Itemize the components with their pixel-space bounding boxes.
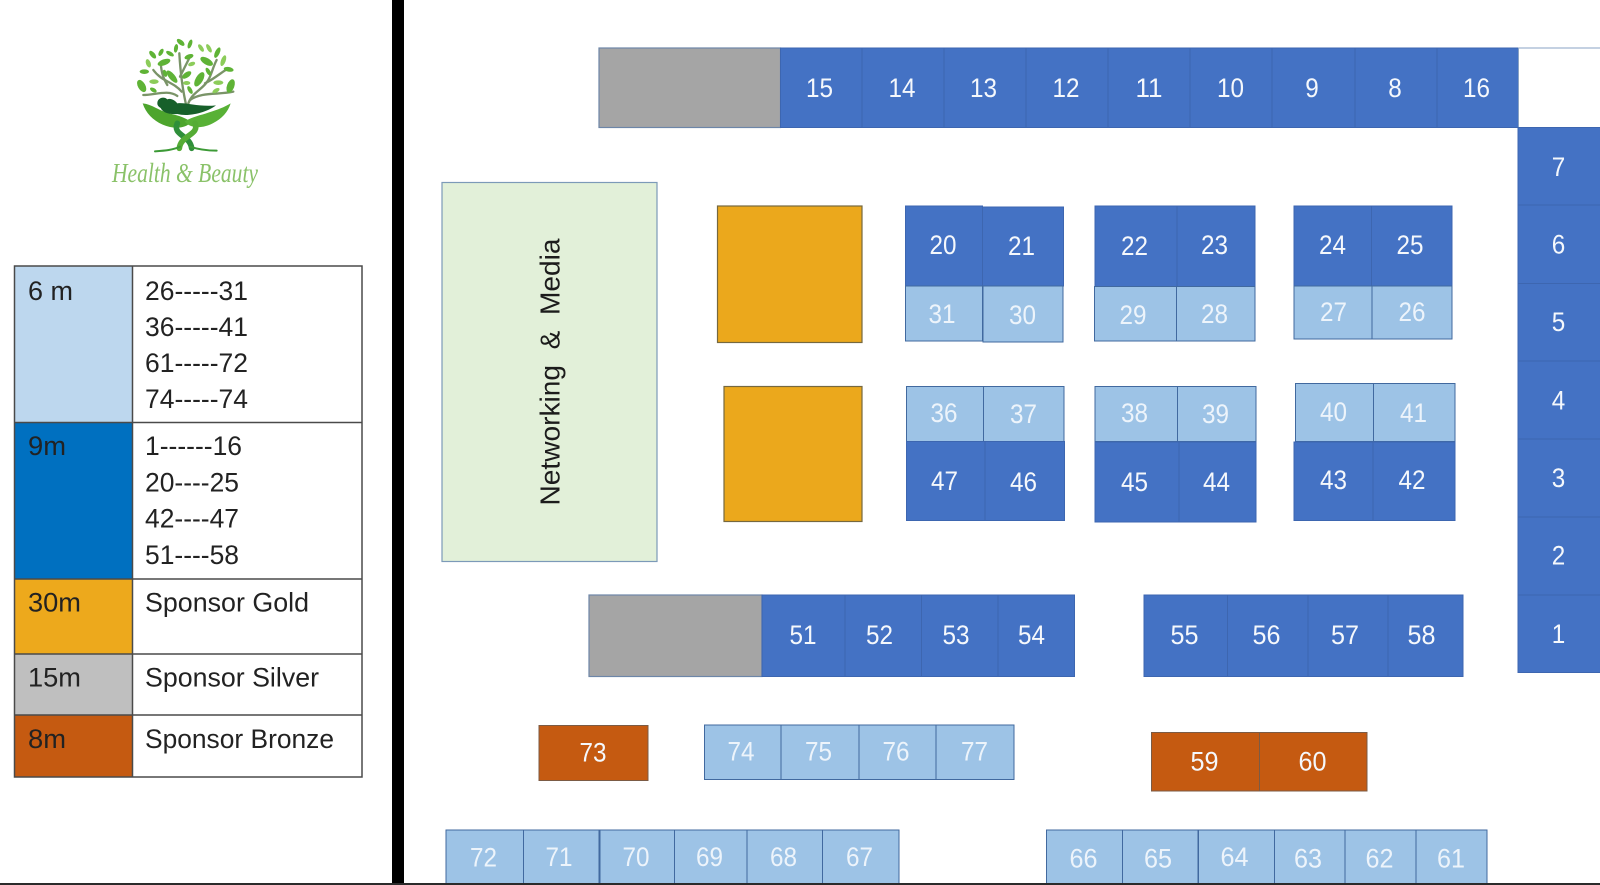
booth 51	[762, 595, 845, 676]
booth 3	[1518, 439, 1600, 517]
logo wordmark: Health & Beauty	[111, 158, 258, 188]
booth 43	[1294, 442, 1373, 520]
booth row 72-67	[446, 830, 899, 885]
booth 74: 74	[728, 736, 754, 766]
booth 69: 69	[696, 842, 723, 872]
booth 71: 71	[546, 842, 572, 872]
booth 75	[781, 725, 859, 780]
networking and media zone: Networking & Media	[534, 238, 566, 506]
booth 51: 51	[790, 620, 816, 650]
booth 77	[936, 725, 1014, 780]
legend: silver: Sponsor Silver	[145, 662, 319, 692]
booth 2	[1518, 517, 1600, 595]
booth 20	[906, 206, 982, 286]
booth 22	[1095, 206, 1177, 286]
booth 12	[1026, 48, 1108, 128]
booth 63	[1274, 830, 1345, 885]
booth 21: 21	[1008, 231, 1035, 261]
booth 6: 6	[1552, 230, 1565, 260]
booth 31: 31	[928, 299, 956, 329]
booth 11	[1108, 48, 1190, 128]
booth 10	[1190, 48, 1272, 128]
booth 60	[1260, 732, 1367, 791]
booth 39: 39	[1202, 399, 1229, 429]
booth 43: 43	[1320, 465, 1347, 495]
booth 23: 23	[1201, 230, 1228, 260]
booth 72	[446, 830, 524, 885]
booth 28: 28	[1201, 299, 1228, 329]
booth 45	[1095, 442, 1179, 522]
booth 38: 38	[1121, 398, 1148, 428]
booth 8: 8	[1388, 73, 1402, 103]
booth block 38-39 / 45-44	[1095, 386, 1256, 522]
booth 65: 65	[1144, 844, 1172, 874]
booth block 24-25 / 27-26	[1294, 206, 1452, 339]
booth 15	[780, 48, 862, 128]
logo: Health & Beauty tree	[111, 38, 258, 188]
booth 27: 27	[1320, 297, 1347, 327]
booth 65	[1122, 830, 1198, 885]
legend table	[14, 266, 362, 777]
booth 8	[1355, 48, 1437, 128]
booth 73	[539, 726, 648, 780]
booth 40	[1296, 384, 1374, 442]
legend: 9m booth ranges: 1------16	[145, 431, 242, 461]
booth 1	[1518, 595, 1600, 672]
booth 3: 3	[1552, 463, 1565, 493]
booth 7	[1518, 128, 1600, 205]
booth 39	[1178, 386, 1256, 442]
silver sponsor booth lower	[589, 595, 762, 676]
booth 40: 40	[1320, 397, 1347, 427]
booth 12: 12	[1052, 73, 1080, 103]
booth 20: 20	[930, 230, 956, 260]
legend: 6 m booth ranges: 74-----74	[145, 384, 248, 414]
booth 16: 16	[1463, 73, 1490, 103]
booth 30	[983, 286, 1063, 342]
legend: 9m size: 9m	[28, 431, 66, 461]
empty corner outline	[1518, 48, 1600, 128]
booth 9: 9	[1305, 73, 1319, 103]
booth row 74-77	[704, 725, 1014, 780]
booth 73: 73	[580, 738, 606, 768]
booth 66	[1046, 830, 1122, 885]
booth 71	[524, 830, 599, 885]
booth 52	[845, 595, 922, 676]
booth 7: 7	[1552, 152, 1565, 182]
icon: reclining figure	[157, 98, 216, 115]
icon: tree branches	[143, 53, 233, 107]
right booth column	[1518, 128, 1600, 672]
booth 25: 25	[1396, 230, 1424, 260]
booth 21	[982, 207, 1064, 286]
booth 44: 44	[1203, 467, 1230, 497]
booth 62: 62	[1366, 844, 1394, 874]
booth 54: 54	[1018, 620, 1045, 650]
booth 64: 64	[1220, 842, 1248, 872]
booth 36	[906, 386, 984, 442]
booth 41: 41	[1400, 398, 1427, 428]
legend: 6 m booth ranges: 36-----41	[145, 312, 248, 342]
booth 41	[1374, 384, 1455, 442]
gold sponsor booth lower	[724, 386, 862, 522]
legend: gold: 30m	[28, 588, 81, 618]
booth 13: 13	[970, 73, 997, 103]
booth 24	[1294, 206, 1372, 286]
booth 14	[862, 48, 944, 128]
booth 24: 24	[1319, 230, 1346, 260]
booth 61: 61	[1437, 844, 1465, 874]
booth 37	[984, 386, 1064, 442]
silver sponsor booth top	[599, 48, 780, 128]
booth row 66-61	[1046, 830, 1487, 885]
icon: leaves	[135, 38, 236, 95]
booth 53	[922, 595, 998, 676]
booth 53: 53	[942, 620, 970, 650]
booth 67: 67	[846, 842, 873, 872]
booth 29: 29	[1120, 300, 1146, 330]
legend: 6 m booth ranges: 61-----72	[145, 348, 248, 378]
booth 46: 46	[1010, 467, 1037, 497]
booth 38	[1095, 386, 1178, 442]
booth 68: 68	[770, 842, 797, 872]
booth 56: 56	[1252, 620, 1280, 650]
legend: silver: 15m	[28, 662, 81, 692]
booth 62	[1345, 830, 1416, 885]
booth 10: 10	[1217, 73, 1244, 103]
booth 5: 5	[1552, 307, 1565, 337]
booth 67	[822, 830, 899, 885]
booth 16	[1437, 48, 1518, 128]
booth row 51-54	[589, 595, 1074, 676]
booth 66: 66	[1070, 844, 1098, 874]
booth 5	[1518, 284, 1600, 361]
booth 22: 22	[1121, 231, 1148, 261]
networking and media zone	[442, 182, 657, 562]
booth 47	[906, 442, 985, 520]
booth 47: 47	[931, 466, 958, 496]
booth 29	[1094, 286, 1176, 341]
booth 57	[1308, 595, 1388, 676]
booth block 20-21 / 31-30	[906, 206, 1064, 342]
booth 72: 72	[470, 842, 497, 872]
legend: gold: Sponsor Gold	[145, 588, 309, 618]
booth 28	[1176, 286, 1255, 341]
legend: bronze: 8m	[28, 724, 66, 754]
booth 77: 77	[961, 736, 988, 766]
booth 59: 59	[1190, 746, 1218, 776]
bottom edge line	[0, 883, 1600, 885]
booth 13	[944, 48, 1026, 128]
booth 27	[1294, 286, 1372, 339]
booth 46	[985, 442, 1064, 520]
booth 30: 30	[1009, 300, 1036, 330]
gold sponsor booth upper	[718, 206, 862, 342]
booth 52: 52	[866, 620, 893, 650]
booth 45: 45	[1121, 467, 1148, 497]
booth block 22-23 / 29-28	[1094, 206, 1255, 341]
booth 36: 36	[930, 398, 958, 428]
legend: 9m booth ranges: 51----58	[145, 540, 239, 570]
booth 76	[859, 725, 936, 780]
legend: gold	[28, 588, 309, 618]
booth 25	[1372, 206, 1452, 286]
booth 76: 76	[882, 736, 910, 766]
icon: twisted trunk	[155, 123, 217, 151]
booth 58: 58	[1408, 620, 1436, 650]
legend: bronze	[28, 724, 334, 754]
booth 55	[1144, 595, 1228, 676]
booth 54	[998, 595, 1074, 676]
top booth row	[599, 48, 1600, 128]
icon: cupped hands	[143, 103, 191, 128]
legend: 6 m booth ranges: 26-----31	[145, 276, 248, 306]
booth 14: 14	[888, 73, 916, 103]
black divider	[392, 0, 404, 885]
booth 2: 2	[1552, 540, 1565, 570]
booth 31	[906, 286, 982, 341]
booth block 40-41 / 43-42	[1294, 384, 1455, 520]
booth block 36-37 / 47-46	[906, 386, 1064, 520]
booth 9	[1272, 48, 1355, 128]
booth 37: 37	[1010, 399, 1037, 429]
legend: 9m booth ranges: 20----25	[145, 468, 239, 498]
booth 58	[1388, 595, 1463, 676]
legend: 9m booth ranges	[145, 431, 242, 570]
booth 23	[1177, 206, 1255, 286]
booth 70: 70	[622, 842, 650, 872]
booth 75: 75	[805, 736, 832, 766]
booth 60: 60	[1298, 746, 1326, 776]
booth 42	[1373, 442, 1455, 520]
booth 69	[674, 830, 747, 885]
booth 55: 55	[1170, 620, 1198, 650]
booth 61	[1416, 830, 1487, 885]
booth 4: 4	[1552, 386, 1565, 416]
booth 64	[1198, 830, 1274, 885]
booth 11: 11	[1136, 73, 1162, 103]
legend: 9m booth ranges: 42----47	[145, 504, 239, 534]
booth 56	[1228, 595, 1308, 676]
legend: 6 m booth ranges	[145, 276, 248, 414]
legend: bronze: Sponsor Bronze	[145, 724, 334, 754]
booth 1: 1	[1552, 619, 1565, 649]
booth 68	[747, 830, 822, 885]
legend: silver	[28, 662, 319, 692]
booth 70	[600, 830, 674, 885]
booth 4	[1518, 361, 1600, 439]
booth 74	[704, 725, 781, 780]
booth 15: 15	[806, 73, 833, 103]
legend: 6 m size: 6 m	[28, 276, 73, 306]
booth 57: 57	[1331, 620, 1359, 650]
booth 59	[1152, 732, 1260, 791]
booth 26: 26	[1398, 297, 1426, 327]
booth 26	[1372, 286, 1452, 339]
booth 63: 63	[1294, 844, 1322, 874]
booth 44	[1179, 442, 1256, 522]
booth 6	[1518, 205, 1600, 284]
booth row 59-60	[1152, 732, 1367, 791]
booth row 55-58	[1144, 595, 1463, 676]
booth 42: 42	[1398, 465, 1426, 495]
